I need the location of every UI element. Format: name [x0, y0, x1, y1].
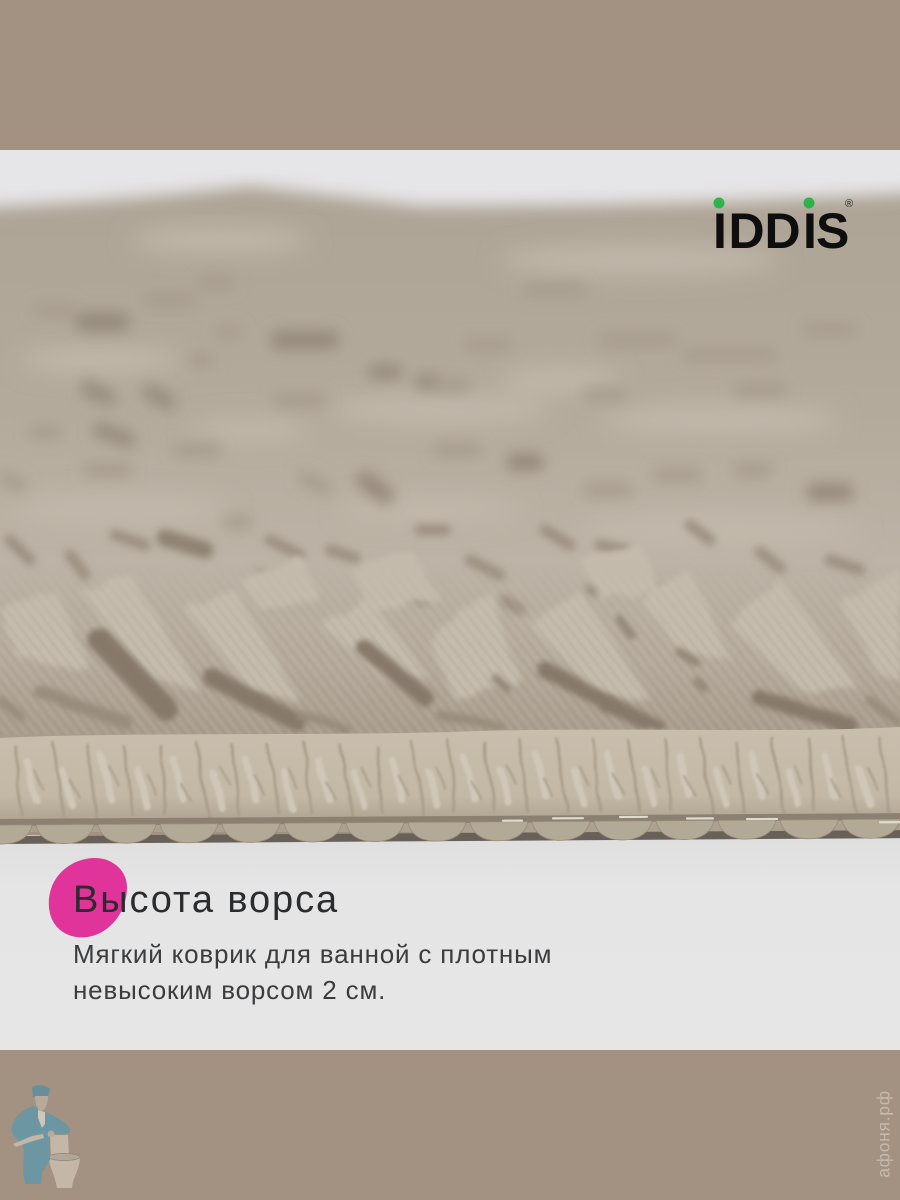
rug bound edge: [0, 727, 900, 832]
foreground dark tuft shadows: [0, 620, 898, 728]
pink accent circle: [48, 858, 127, 938]
text block: description: невысоким ворсом 2 см.: [73, 975, 386, 1005]
far pile shadows: [5, 283, 850, 522]
text block: description: Мягкий коврик для ванной с плотным: [73, 939, 552, 969]
middle pile shadows: [10, 525, 860, 610]
text block: description: [73, 939, 552, 1005]
foreground hair strands: [0, 560, 900, 735]
rug stitched scalloped hem: [0, 813, 900, 844]
heading: Высота ворса: [73, 879, 339, 921]
logo: IDDIS: IDDIS: [713, 203, 849, 259]
logo: IDDIS: ®: [845, 198, 853, 210]
floor: [0, 835, 900, 1050]
foreground light tufts: [0, 545, 900, 700]
background wall: [0, 150, 900, 218]
watermark: афоня.рф: [874, 1090, 894, 1178]
icon: plumber with toilet: [11, 1085, 80, 1188]
rug pile: [0, 186, 900, 745]
edge thread twists: [14, 738, 888, 818]
blurred light pile patches: [39, 225, 813, 435]
